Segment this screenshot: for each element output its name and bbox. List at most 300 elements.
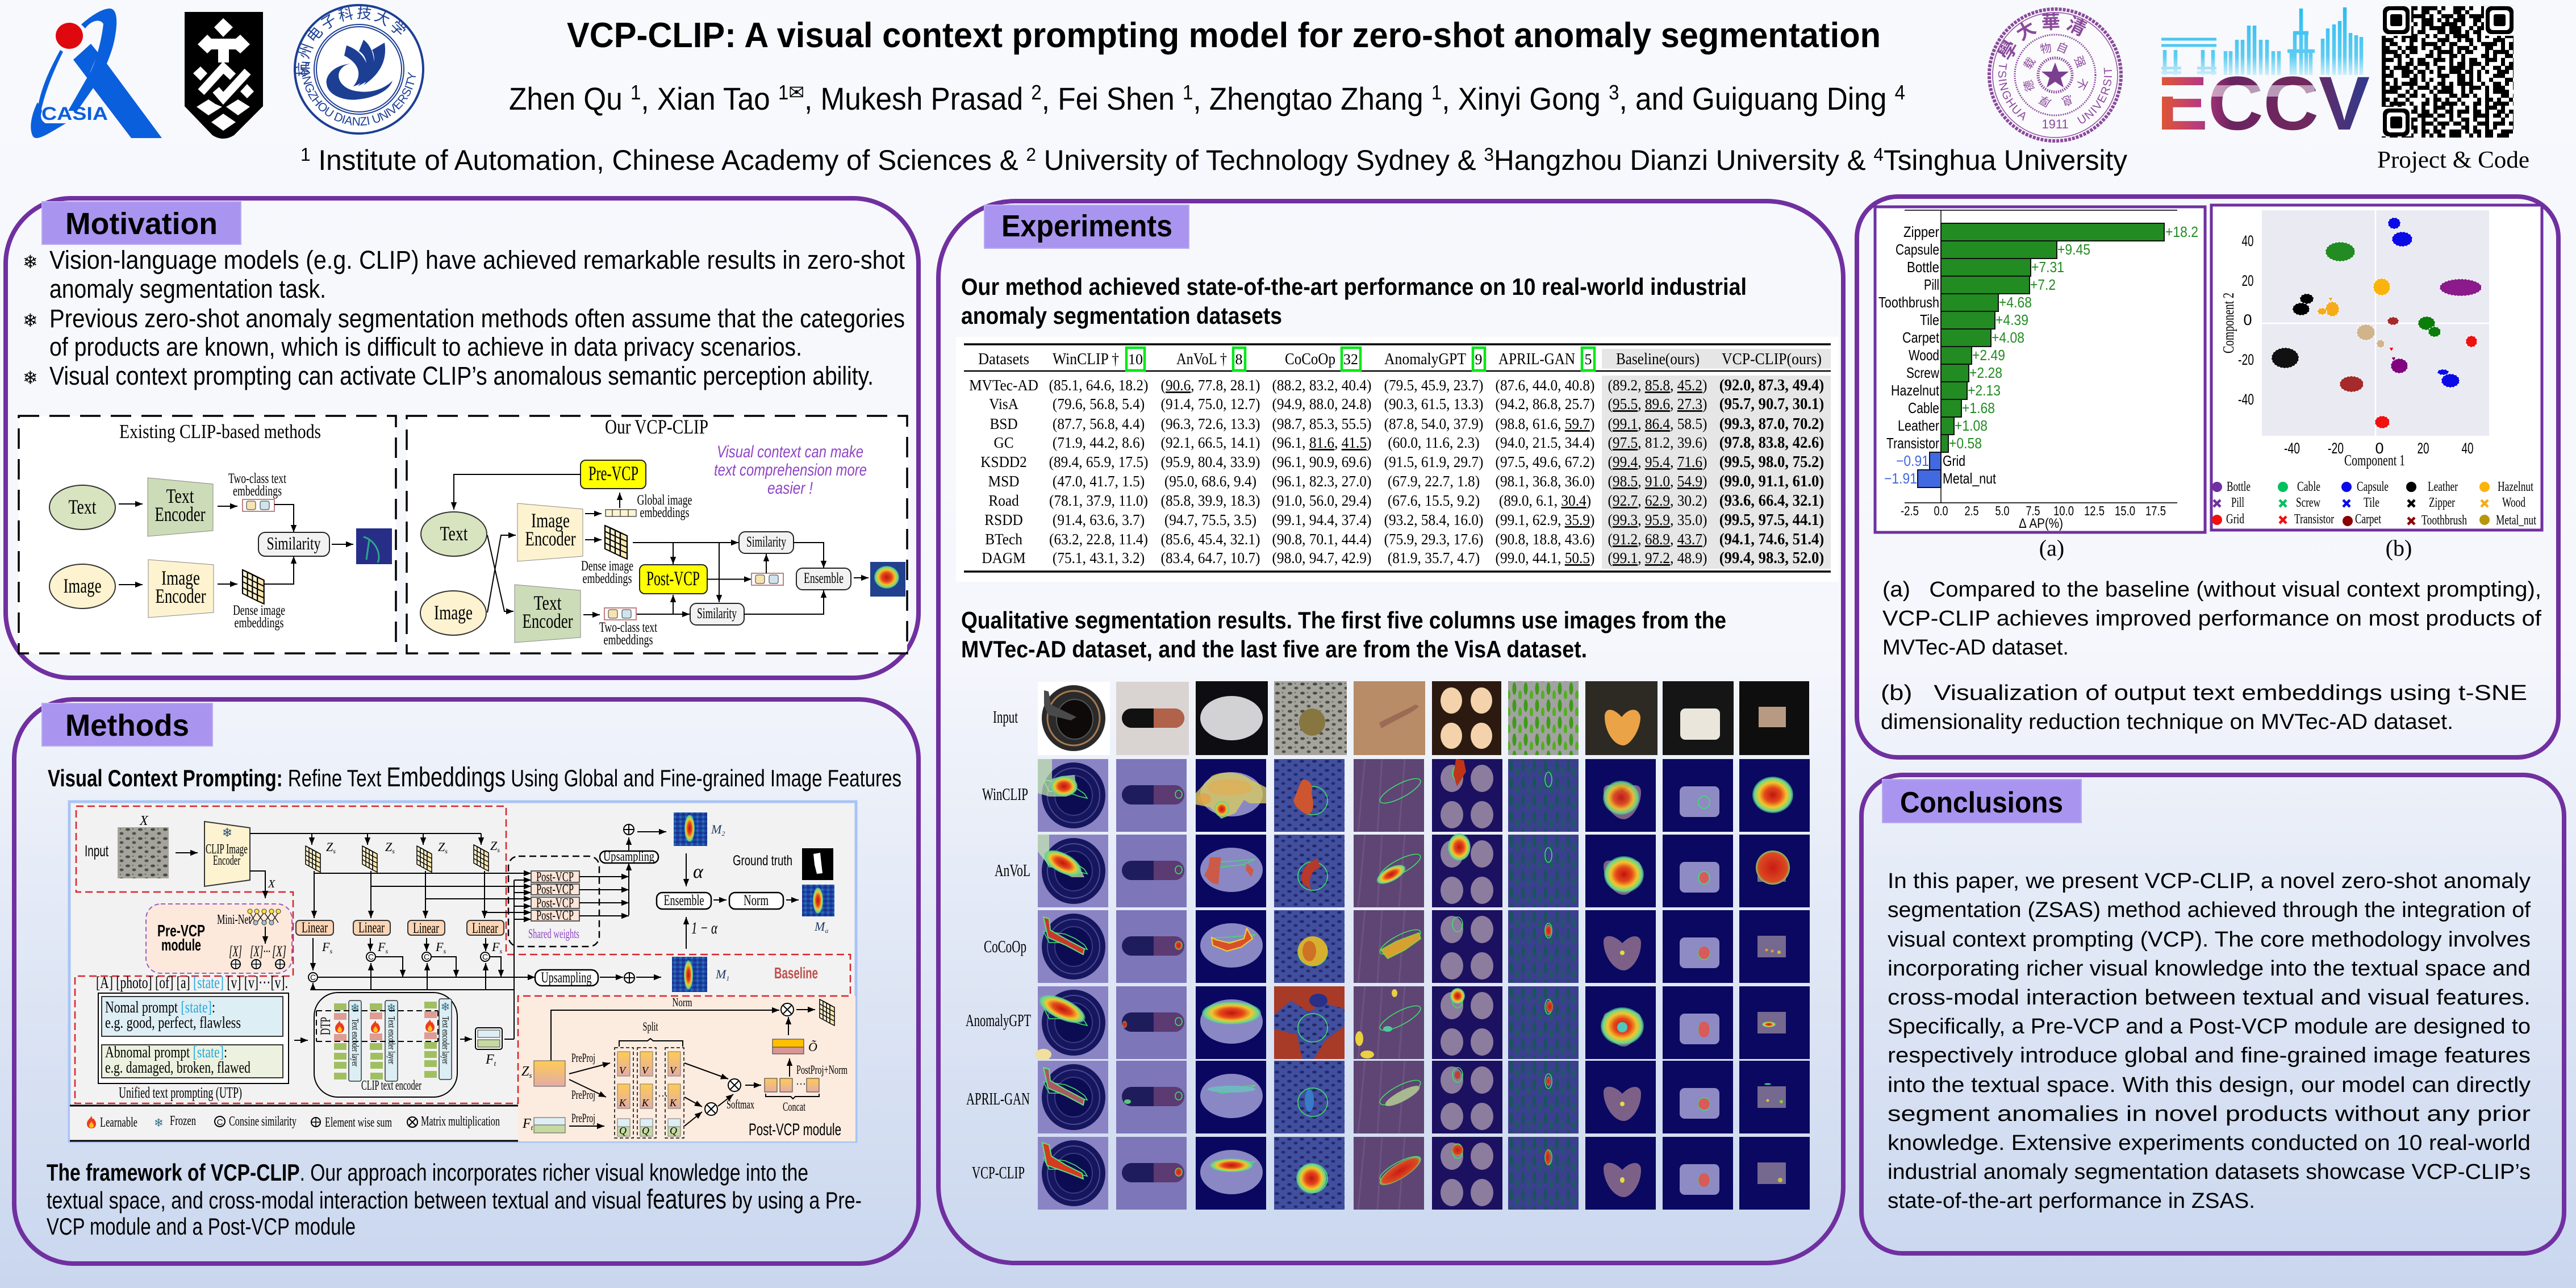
- callout: visual context: text comprehension more: [714, 461, 867, 480]
- chart: t-SNE scatter: -40: [2284, 440, 2300, 457]
- image feature connectors: X: [268, 878, 275, 890]
- diagram: our VCP-CLIP: Global image: [637, 493, 692, 508]
- framework caption: [47, 1159, 862, 1240]
- table header: 10: [1128, 351, 1143, 368]
- unified text prompting: [96, 973, 289, 1101]
- authors: 1: [1183, 81, 1193, 104]
- chart: delta AP bars: Wood: [1909, 347, 1939, 364]
- post-VCP module internals: K: [641, 1097, 649, 1108]
- bullet list: Previous zero-shot anomaly segmentation methods often assume that the categories: [49, 304, 905, 333]
- table header: [978, 350, 1822, 368]
- heading: Methods: [42, 703, 212, 746]
- chart: delta AP bars: −0.91: [1896, 452, 1929, 469]
- chart: delta AP bars: Toothbrush: [1878, 294, 1939, 311]
- legend band: ❄: [154, 1117, 164, 1129]
- heading: Conclusions: [1882, 780, 2081, 823]
- conclusions text: segment anomalies in novel products without any prior: [1888, 1102, 2531, 1126]
- table rows: (99.1, 94.4, 37.4): [1272, 511, 1371, 528]
- table rows: (63.2, 22.8, 11.4): [1049, 530, 1148, 548]
- table rows: (94.1, 74.6, 51.4): [1719, 530, 1824, 548]
- table rows: (98.1, 36.8, 36.0): [1496, 472, 1594, 490]
- table rows: (99.1, 97.2, 48.9): [1608, 549, 1707, 566]
- chart: t-SNE scatter: 40: [2241, 232, 2254, 249]
- table rows: (87.6, 44.0, 40.8): [1496, 376, 1594, 394]
- conclusions text: respectively introduce global and fine-grained image features: [1888, 1044, 2531, 1068]
- conclusions text: Specifically, a Pre-VCP and a Post-VCP module are designed to: [1888, 1015, 2531, 1039]
- row: AnomalyGPT: [966, 986, 1810, 1060]
- cosine similarity connectors: C: [424, 952, 429, 961]
- ensemble and norm: Norm: [744, 892, 769, 908]
- chart: delta AP bars: +2.13: [1968, 382, 2001, 399]
- cosine similarity connectors: s: [443, 947, 446, 955]
- logo: Hangzhou Dianzi University: HANGZHOU DIANZI UNIVERSITY: [301, 61, 416, 126]
- CLIP text encoder: CLIP text encoder: [361, 1078, 421, 1093]
- table rows: (89.0, 6.1, 30.4): [1499, 491, 1591, 509]
- chart: delta AP bars: Metal_nut: [1943, 470, 1997, 487]
- panel: conclusions: [1861, 775, 2564, 1253]
- row: VCP-CLIP: VCP-CLIP: [972, 1162, 1025, 1182]
- table header: APRIL-GAN: [1498, 350, 1575, 368]
- logo: Tsinghua University: 學大華清: [1997, 12, 2087, 60]
- table rows: (94.9, 88.0, 24.8): [1272, 395, 1371, 412]
- table header: 9: [1475, 351, 1483, 368]
- table rows: (92.1, 66.5, 14.1): [1161, 433, 1260, 451]
- panel: methods: [14, 699, 918, 1264]
- pre-VCP module: [X]: [229, 943, 242, 960]
- post-VCP module internals: K: [619, 1097, 627, 1108]
- chart: delta AP bars: 15.0: [2115, 503, 2135, 518]
- table rows: (79.5, 45.9, 23.7): [1384, 376, 1483, 394]
- table rows: (92.0, 87.3, 49.4): [1719, 376, 1824, 394]
- table header: 8: [1235, 351, 1243, 368]
- diagram: our VCP-CLIP: Pre-VCP: [588, 462, 638, 485]
- linear projection boxes: Linear: [302, 919, 328, 936]
- table rows: BSD: [990, 415, 1018, 432]
- chart captions: (a): [2039, 535, 2064, 561]
- framework diagram: Post-VCP: [536, 896, 574, 911]
- logo: ECCV: ECCV: [2157, 61, 2370, 146]
- cosine similarity connectors: F: [322, 940, 329, 954]
- framework caption: VCP module and a Post-VCP module: [47, 1213, 356, 1240]
- diagram: our VCP-CLIP: Our VCP-CLIP: [605, 415, 708, 438]
- unified text prompting: [A] [photo] [of] [a] [state] [v] [v]···[v].: [96, 973, 288, 992]
- framework diagram: α: [693, 861, 704, 882]
- map Ma and ground truth: a: [825, 927, 828, 935]
- post-VCP module internals: K: [669, 1097, 677, 1108]
- chart: delta AP bars: 5.0: [1995, 503, 2010, 518]
- panel: motivation: [6, 198, 918, 678]
- table rows: (91.0, 56.0, 29.4): [1272, 491, 1371, 509]
- diagram: our VCP-CLIP: Two-class text: [599, 620, 657, 635]
- scatter legend: [2212, 480, 2536, 528]
- result descriptions: dimensionality reduction technique on MVTec-AD dataset.: [1881, 710, 2453, 734]
- map M1 and baseline label: Baseline: [774, 964, 818, 982]
- post-VCP module internals: s: [529, 1071, 532, 1079]
- conclusions text: visual context prompting (VCP). The core methodology involves: [1888, 928, 2531, 952]
- table rows: (71.9, 44.2, 8.6): [1053, 433, 1145, 451]
- table rows: (94.7, 75.5, 3.5): [1164, 511, 1256, 528]
- conclusions text: knowledge. Extensive experiments conducted on 10 real-world: [1888, 1131, 2531, 1155]
- patch feature cubes: Z: [385, 840, 392, 854]
- post-VCP module internals: [521, 995, 847, 1139]
- heading: Experiments: Experiments: [1001, 209, 1172, 243]
- conclusions text: industrial anomaly segmentation datasets showcase VCP-CLIP’s: [1888, 1160, 2531, 1184]
- table rows: (78.1, 37.9, 11.0): [1049, 491, 1148, 509]
- table rows: (75.9, 29.3, 17.6): [1384, 530, 1483, 548]
- subheading: performance: Our method achieved state-of-the-art performance on 10 real-world industrial: [961, 273, 1747, 300]
- diagram: our VCP-CLIP: Text: [440, 522, 468, 545]
- row: AnomalyGPT: AnomalyGPT: [966, 1010, 1031, 1030]
- diagram: our VCP-CLIP: Encoder: [523, 610, 573, 632]
- diagram: our VCP-CLIP: [407, 415, 907, 653]
- patch feature cubes: [306, 839, 500, 872]
- affiliations: 1: [300, 144, 311, 165]
- logo: CASIA: [31, 9, 162, 138]
- citation boxes: [1126, 348, 1594, 370]
- diagram: existing CLIP-based methods: Encoder: [156, 585, 206, 607]
- map Ma and ground truth: Ground truth: [733, 853, 792, 869]
- result descriptions: MVTec-AD dataset.: [1882, 636, 2069, 660]
- diagram: our VCP-CLIP: Dense image: [581, 558, 633, 574]
- chart: delta AP bars: Leather: [1898, 417, 1939, 434]
- unified text prompting: Abnomal prompt [state]:: [105, 1043, 227, 1061]
- logo: Hangzhou Dianzi University: [294, 4, 424, 135]
- framework diagram: [69, 802, 856, 1141]
- element-wise sum bottom: [624, 973, 634, 983]
- bullet list: ❄: [23, 368, 38, 388]
- table rows: (97.8, 83.8, 42.6): [1719, 433, 1824, 452]
- Ft text feature block: t: [494, 1059, 496, 1068]
- one minus alpha arrow: [686, 917, 718, 949]
- row: VCP-CLIP: [972, 1137, 1810, 1210]
- bullet list: [23, 245, 905, 390]
- table rows: (79.6, 56.8, 5.4): [1053, 395, 1145, 412]
- chart: delta AP bars: Capsule: [1896, 241, 1939, 258]
- diagram: existing CLIP-based methods: Dense image: [233, 603, 285, 618]
- ensemble and norm: Ensemble: [663, 892, 704, 908]
- conclusions text: state-of-the-art performance in ZSAS.: [1888, 1189, 2255, 1213]
- post-VCP module internals: Concat: [783, 1099, 805, 1114]
- table rows: (98.0, 94.7, 42.9): [1272, 549, 1371, 566]
- table rows: (85.1, 64.6, 18.2): [1049, 376, 1148, 394]
- linear projection boxes: Linear: [472, 920, 498, 936]
- results table: [956, 337, 1839, 582]
- image feature connectors: [250, 833, 531, 1039]
- CLIP text encoder: ❄: [441, 1001, 450, 1014]
- heading: Methods: Methods: [65, 708, 189, 743]
- subheading: qualitative results: Qualitative segmentation results. The first five columns use images from the: [961, 607, 1726, 633]
- CLIP image encoder: CLIP Image: [206, 842, 248, 857]
- chart: t-SNE scatter: [2211, 205, 2542, 530]
- upsampling bottom: Upsampling: [541, 969, 592, 986]
- chart: t-SNE scatter: -20: [2328, 440, 2344, 457]
- row: AnVoL: AnVoL: [995, 860, 1030, 880]
- diagram: our VCP-CLIP: embeddings: [640, 505, 690, 520]
- logo: CASIA: CASIA: [41, 103, 108, 124]
- table rows: (85.6, 45.4, 32.1): [1161, 530, 1260, 548]
- authors: , Mukesh Prasad: [804, 81, 1031, 116]
- chart: delta AP bars: Transistor: [1886, 435, 1939, 452]
- pre-VCP module: module: [161, 936, 201, 954]
- affiliations: Institute of Automation, Chinese Academy of Sciences &: [311, 144, 1026, 176]
- chart captions: [2039, 535, 2412, 561]
- table rows: (93.2, 58.4, 16.0): [1384, 511, 1483, 528]
- post-VCP module internals: ···: [658, 1090, 668, 1102]
- chart: t-SNE scatter: 20: [2241, 272, 2254, 289]
- table rows: (91.4, 63.6, 3.7): [1053, 511, 1145, 528]
- authors: 3: [1609, 81, 1619, 104]
- table rows: BTech: [985, 530, 1022, 548]
- table rows: (99.3, 87.0, 70.2): [1719, 415, 1824, 433]
- table rows: (97.5, 49.6, 67.2): [1496, 453, 1594, 470]
- table rows: (95.0, 68.6, 9.4): [1164, 472, 1256, 490]
- table rows: (90.6, 77.8, 28.1): [1161, 376, 1260, 394]
- conclusions text: [1888, 869, 2531, 1213]
- post-VCP module internals: PreProj: [571, 1111, 595, 1125]
- affiliations: University of Technology Sydney &: [1036, 144, 1484, 176]
- bullet list: ❄: [23, 310, 38, 331]
- map M1 and baseline label: 1: [726, 974, 729, 982]
- shared weights group: [508, 856, 599, 947]
- cosine similarity connectors: F: [378, 940, 385, 954]
- legend band: Learnable: [100, 1115, 137, 1130]
- chart: t-SNE scatter: 20: [2418, 440, 2429, 457]
- heading: Motivation: Motivation: [65, 207, 218, 241]
- callout: visual context: Visual context can make: [717, 443, 863, 461]
- project and code caption: Project & Code: [2377, 147, 2529, 173]
- scatter legend: Wood: [2502, 495, 2525, 510]
- result descriptions: (b) Visualization of output text embeddings using t-SNE: [1881, 681, 2527, 705]
- post-VCP module internals: V: [670, 1065, 677, 1076]
- table rows: (83.4, 64.7, 10.7): [1161, 549, 1260, 566]
- authors: 4: [1895, 81, 1905, 104]
- table rows: (60.0, 11.6, 2.3): [1388, 433, 1480, 451]
- table rows: RSDD: [984, 511, 1023, 528]
- table header: 5: [1585, 351, 1592, 368]
- subheading: qualitative results: MVTec-AD dataset, and the last five are from the VisA dataset.: [961, 636, 1587, 662]
- authors: , Zhengtao Zhang: [1193, 81, 1431, 116]
- legend band: Frozen: [170, 1114, 196, 1128]
- scatter legend: Metal_nut: [2496, 513, 2536, 528]
- red dashed regions: [75, 806, 850, 1103]
- affiliations: Hangzhou Dianzi University &: [1494, 144, 1873, 176]
- logo: Hangzhou Dianzi University: 杭州电子科技大学: [296, 6, 406, 76]
- authors: Zhen Qu: [509, 81, 633, 116]
- CLIP image encoder: Encoder: [213, 853, 240, 868]
- chart: delta AP bars: Cable: [1908, 399, 1939, 416]
- chart: delta AP bars: +0.58: [1949, 435, 1982, 452]
- table rows: (96.1, 81.6, 41.5): [1272, 433, 1371, 451]
- row: Input: Input: [993, 707, 1018, 727]
- chart: delta AP bars: -2.5: [1901, 503, 1919, 518]
- chart: delta AP bars: Bottle: [1907, 259, 1939, 276]
- cosine similarity connectors: s: [385, 947, 388, 955]
- patch feature cubes: Z: [438, 840, 445, 854]
- linear projection boxes: Linear: [413, 920, 439, 936]
- table rows: (87.8, 54.0, 37.9): [1384, 415, 1483, 432]
- one minus alpha arrow: 1 − α: [691, 919, 718, 937]
- CLIP image encoder: [204, 822, 250, 886]
- chart: t-SNE scatter: 0: [2243, 311, 2252, 328]
- scatter legend: Bottle: [2227, 480, 2251, 494]
- table header: WinCLIP †: [1053, 350, 1119, 368]
- framework diagram: Post-VCP: [536, 908, 574, 923]
- chart: delta AP bars: +18.2: [2165, 223, 2198, 240]
- diagram: our VCP-CLIP: Post-VCP: [646, 567, 700, 590]
- diagram: existing CLIP-based methods: Text: [68, 495, 97, 518]
- diagram: existing CLIP-based methods: Two-class text: [228, 471, 286, 486]
- CLIP text encoder: ❄: [350, 1002, 360, 1015]
- bullet list: Vision-language models (e.g. CLIP) have achieved remarkable results in zero-shot: [49, 245, 905, 274]
- patch feature cubes: s: [445, 847, 448, 855]
- table rows: (89.2, 85.8, 45.2): [1608, 376, 1707, 394]
- post-VCP module internals: PreProj: [571, 1087, 595, 1102]
- chart: delta AP bars: +2.28: [1969, 364, 2002, 381]
- post-VCP module internals: V: [642, 1065, 649, 1076]
- chart: t-SNE scatter: Component 2: [2220, 293, 2237, 353]
- segmentation results grid: [966, 681, 1810, 1210]
- unified text prompting: Unified text prompting (UTP): [119, 1084, 242, 1101]
- chart: delta AP bars: 2.5: [1964, 503, 1979, 518]
- post-VCP module internals: PreProj: [571, 1051, 595, 1065]
- table rows: Road: [988, 491, 1019, 509]
- scatter legend: Toothbrush: [2421, 513, 2467, 528]
- post-VCP module internals: ···: [796, 1078, 806, 1090]
- chart: delta AP bars: Carpet: [1902, 329, 1940, 346]
- diagram: our VCP-CLIP: Similarity: [746, 533, 786, 550]
- logo: Tsinghua University: [1988, 7, 2123, 143]
- post-VCP module internals: Q: [619, 1125, 627, 1136]
- table rows: (98.7, 85.3, 55.5): [1272, 415, 1371, 432]
- table rows: VisA: [989, 395, 1018, 412]
- cosine similarity connectors: C: [482, 952, 488, 961]
- CLIP image encoder: ❄: [222, 826, 232, 840]
- diagram: our VCP-CLIP: embeddings: [603, 632, 653, 648]
- conclusions text: into the textual space. With this design, our model can directly: [1888, 1073, 2531, 1097]
- row: CoCoOp: [984, 910, 1810, 983]
- row: CoCoOp: CoCoOp: [984, 936, 1026, 956]
- table rows: (91.2, 68.9, 43.7): [1608, 530, 1707, 548]
- chart: delta AP bars: Hazelnut: [1891, 382, 1940, 399]
- table rows: GC: [993, 433, 1014, 451]
- chart: delta AP bars: +9.45: [2057, 241, 2090, 258]
- patch feature cubes: Z: [326, 840, 333, 854]
- conclusions text: incorporating richer visual knowledge into the textual space and: [1888, 957, 2531, 981]
- patch feature cubes: s: [333, 847, 336, 855]
- pre-VCP module: [X]···: [250, 943, 270, 960]
- legend band: C: [217, 1118, 223, 1127]
- callout: visual context: easier !: [767, 479, 813, 498]
- legend band: Element wise sum: [325, 1115, 392, 1130]
- cosine similarity connectors: s: [499, 947, 502, 955]
- scatter clusters: [2272, 218, 2482, 428]
- post-VCP module internals: Q: [670, 1125, 677, 1136]
- map Ma and ground truth: M: [815, 919, 825, 933]
- cosine similarity connectors: F: [436, 940, 443, 954]
- table rows: (99.0, 44.1, 50.5): [1496, 549, 1594, 566]
- scatter legend: Pill: [2231, 495, 2244, 510]
- table rows: (99.1, 62.9, 35.9): [1496, 511, 1594, 528]
- table header: VCP-CLIP(ours): [1722, 350, 1822, 368]
- post-VCP module internals: t: [531, 1123, 533, 1132]
- scatter legend: Hazelnut: [2498, 480, 2533, 494]
- CLIP text encoder: DTP: [318, 1017, 333, 1035]
- table rows: (95.5, 89.6, 27.3): [1608, 395, 1707, 412]
- input image: [85, 814, 169, 878]
- conclusions text: cross-modal interaction between textual and visual features.: [1888, 986, 2531, 1010]
- table rows: (99.4, 98.3, 52.0): [1719, 549, 1824, 567]
- table rows: (97.5, 81.2, 39.6): [1608, 433, 1707, 451]
- diagram: existing CLIP-based methods: Text: [166, 485, 194, 507]
- logo: Tsinghua University: 1911: [2041, 117, 2069, 131]
- conclusions text: segmentation (ZSAS) method achieved through the integration of: [1888, 898, 2531, 922]
- table rows: (98.5, 91.0, 54.9): [1608, 472, 1707, 490]
- post-VCP module internals: Softmax: [727, 1097, 754, 1111]
- chart: delta AP bars: 10.0: [2053, 503, 2074, 518]
- chart: t-SNE scatter: 0: [2375, 440, 2384, 457]
- map M2: [674, 812, 725, 846]
- affiliations: 4: [1873, 144, 1884, 165]
- bullet list: of products are known, which is difficult to achieve in data privacy scenarios.: [49, 332, 802, 361]
- scatter legend: Capsule: [2357, 480, 2389, 494]
- pre-VCP module: [X]: [272, 943, 286, 960]
- element-wise sum top: [624, 824, 634, 835]
- result descriptions: (a) Compared to the baseline (without visual context prompting),: [1882, 578, 2541, 602]
- chart: delta AP bars: +2.49: [1972, 347, 2005, 364]
- table rows: (67.9, 22.7, 1.8): [1388, 472, 1480, 490]
- diagram: existing CLIP-based methods: Existing CLIP-based methods: [119, 420, 321, 443]
- patch feature cubes: s: [392, 847, 395, 855]
- shared weights group: Shared weights: [528, 927, 579, 941]
- chart: delta AP bars: Tile: [1920, 311, 1939, 328]
- chart: delta AP bars: Δ AP(%): [2019, 516, 2063, 531]
- table rows: (95.7, 90.7, 30.1): [1719, 395, 1824, 413]
- table rows: MVTec-AD: [969, 376, 1038, 394]
- scatter legend: Cable: [2297, 480, 2320, 494]
- heading: Motivation: [42, 202, 241, 244]
- unified text prompting: e.g. damaged, broken, flawed: [105, 1058, 250, 1077]
- bullet list: Visual context prompting can activate CLIP’s anomalous semantic perception ability.: [49, 361, 874, 390]
- chart: delta AP bars: 7.5: [2026, 503, 2040, 518]
- row: WinCLIP: WinCLIP: [982, 784, 1028, 804]
- post-VCP module internals: Post-VCP module: [749, 1120, 841, 1139]
- post-VCP module internals: Q: [642, 1125, 649, 1136]
- pre-VCP module: Pre-VCP: [157, 922, 205, 940]
- unified text prompting: e.g. good, perfect, flawless: [105, 1014, 241, 1032]
- chart: delta AP bars: +4.39: [1995, 311, 2028, 328]
- authors: , Xian Tao: [641, 81, 778, 116]
- input image: Input: [85, 842, 108, 860]
- scatter legend: Grid: [2226, 512, 2244, 527]
- chart: delta AP bars: Zipper: [1903, 223, 1939, 240]
- table rows: (88.2, 83.2, 40.4): [1272, 376, 1371, 394]
- scatter legend: Zipper: [2429, 495, 2455, 510]
- scatter legend: Carpet: [2355, 512, 2381, 527]
- title: VCP-CLIP: A visual context prompting model for zero-shot anomaly segmentation: [567, 16, 1881, 55]
- table header: AnomalyGPT: [1384, 350, 1466, 368]
- callout: visual context: [714, 443, 867, 498]
- Ft text feature block: F: [486, 1052, 494, 1067]
- chart: delta AP bars: +1.68: [1962, 399, 1995, 416]
- diagram: existing CLIP-based methods: [19, 416, 396, 653]
- authors: 2: [1031, 81, 1042, 104]
- pre-VCP module: Mini-Net: [217, 912, 251, 927]
- result descriptions: [1881, 578, 2541, 734]
- map M1 and baseline label: [672, 957, 818, 992]
- input image: X: [139, 814, 149, 828]
- diagram: existing CLIP-based methods: embeddings: [234, 615, 284, 631]
- cosine similarity connectors: [308, 938, 535, 990]
